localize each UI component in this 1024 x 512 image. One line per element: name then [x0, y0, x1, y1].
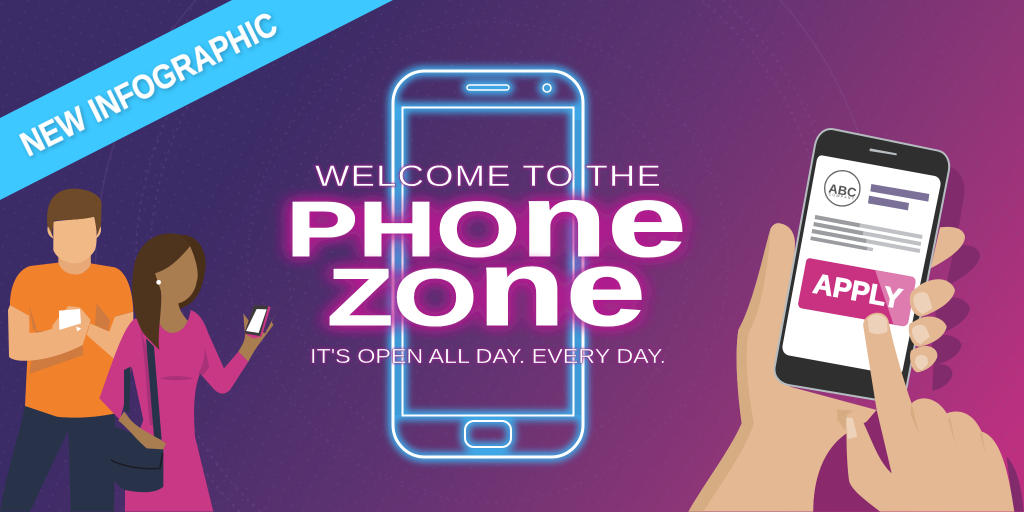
fingernails: [912, 292, 932, 370]
speaker: [467, 85, 509, 90]
pointing hand: [846, 313, 1014, 512]
phone body: [774, 129, 949, 402]
camera: [543, 84, 551, 92]
fingers gripping phone: [909, 227, 965, 372]
hand and phone illustration: [688, 129, 1024, 512]
drop shadows: [932, 165, 1024, 512]
face and neck: [154, 246, 198, 334]
phone body: [393, 71, 583, 457]
phone screen: [782, 155, 941, 375]
abc company logo: COMPANY: [828, 192, 855, 201]
header lines: [868, 184, 929, 210]
tagline: IT'S OPEN ALL DAY. EVERY DAY.: [310, 346, 666, 368]
waist seam: [160, 376, 193, 380]
shadow between hands: [813, 410, 893, 512]
heading block: [286, 160, 687, 368]
heading: welcome to the: WELCOME TO THE: [315, 160, 662, 193]
hair front: [132, 233, 190, 350]
apply button: [798, 258, 915, 326]
heading: phone: PHOne: [286, 163, 687, 278]
dress fold: [140, 327, 160, 427]
abc company logo: ABC: [827, 181, 857, 200]
raised hand: [238, 310, 278, 362]
handheld phone: [244, 305, 271, 338]
home button: [465, 421, 511, 447]
hair: [47, 189, 102, 235]
phone screen: [402, 108, 574, 416]
arms: [8, 305, 133, 361]
t-shirt: [10, 263, 133, 418]
arm shadow: [198, 348, 209, 375]
heading: zone: ZOne: [327, 228, 646, 349]
neck: [58, 253, 91, 278]
apply button: APPLY: [811, 268, 905, 315]
thumb nail: [846, 418, 857, 439]
finger creases: [837, 403, 986, 453]
back hand: [688, 223, 877, 512]
background concentric rings: [96, 0, 880, 512]
woman: [99, 233, 278, 512]
shirt shadow: [28, 303, 110, 374]
speaker: [869, 148, 897, 155]
hand on bag: [118, 412, 166, 449]
face: [53, 217, 97, 263]
earring: [156, 280, 161, 285]
ears: [47, 225, 101, 238]
neon phone outline: [393, 71, 583, 457]
hair back: [178, 235, 206, 309]
dress: [99, 310, 248, 512]
pointing fingernail: [868, 314, 887, 334]
trousers: [0, 405, 115, 512]
bag: [110, 427, 163, 492]
banner: new infographic: [0, 0, 393, 200]
abc company logo: [825, 171, 860, 206]
man: [0, 189, 133, 512]
people illustration: [0, 189, 278, 512]
bag strap: [124, 338, 162, 440]
body text lines: [810, 215, 923, 253]
hand and phone: [52, 306, 91, 345]
